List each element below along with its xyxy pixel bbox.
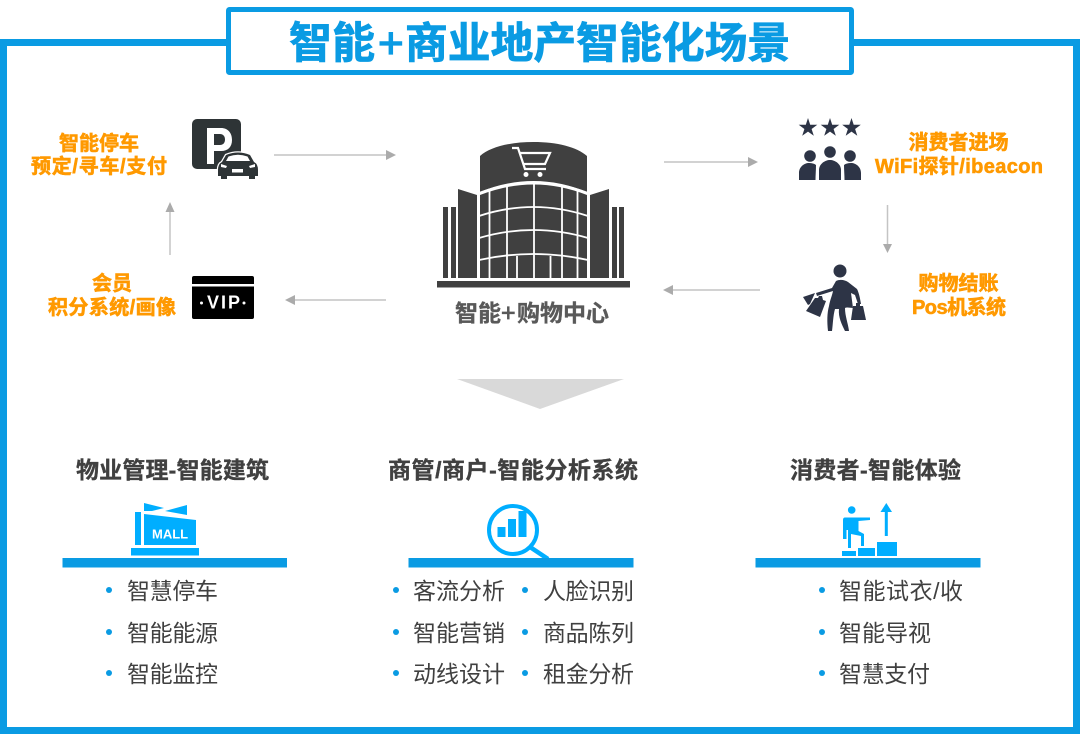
bar bbox=[62, 558, 287, 568]
building base bbox=[437, 281, 630, 288]
arrow: parking to mall bbox=[274, 150, 396, 160]
side wings and columns bbox=[458, 189, 609, 278]
heading: 商管/商户-智能分析系统 bbox=[388, 457, 638, 483]
label: consumer entry bbox=[875, 131, 1043, 178]
label: membership bbox=[48, 272, 176, 319]
label: consumer entry: WiFi探针/ibeacon bbox=[875, 155, 1043, 178]
panel: consumer experience bbox=[756, 457, 980, 687]
icon: magnifier with bars bbox=[489, 506, 548, 559]
bar bbox=[408, 558, 634, 568]
list bbox=[819, 578, 963, 687]
list: 智慧停车 bbox=[127, 578, 218, 604]
title text: 商业地产智能化场景 bbox=[405, 20, 790, 68]
title text: 智能 bbox=[289, 20, 375, 68]
list bbox=[393, 578, 634, 687]
label: membership: 会员 bbox=[92, 272, 132, 295]
list bbox=[106, 578, 218, 687]
icon: VIP card bbox=[192, 276, 254, 319]
divider triangle bbox=[457, 379, 624, 409]
arrow: checkout to mall bbox=[663, 285, 760, 295]
panel: mall operators bbox=[388, 457, 638, 687]
arrow: VIP to parking bbox=[166, 202, 174, 255]
list: 智能导视 bbox=[839, 620, 931, 646]
label: checkout bbox=[912, 272, 1006, 319]
icon: mall: MALL bbox=[152, 526, 188, 542]
title box bbox=[228, 10, 852, 72]
building label: 智能 bbox=[455, 300, 501, 326]
panel: property management bbox=[62, 457, 287, 687]
title text: + bbox=[378, 19, 404, 68]
list: 智慧支付 bbox=[839, 661, 930, 687]
building label: + bbox=[501, 299, 516, 327]
label: smart parking: 智能停车 bbox=[59, 131, 139, 155]
building label bbox=[455, 299, 609, 327]
label: smart parking bbox=[31, 131, 167, 178]
arrow: consumers to checkout bbox=[883, 205, 892, 253]
list: 智能监控 bbox=[127, 661, 218, 687]
label: membership: 积分系统/画像 bbox=[48, 295, 176, 319]
label: smart parking: 预定/寻车/支付 bbox=[31, 154, 167, 178]
heading: 物业管理-智能建筑 bbox=[76, 457, 269, 483]
label: checkout: Pos机系统 bbox=[912, 295, 1006, 319]
heading: 消费者-智能体验 bbox=[790, 457, 961, 483]
roof with cart bbox=[480, 142, 587, 192]
list: 客流分析 bbox=[413, 578, 505, 604]
list: 智能营销 bbox=[413, 620, 505, 646]
list: 动线设计 bbox=[413, 661, 505, 687]
building label: 购物中心 bbox=[517, 300, 609, 326]
list: 智能能源 bbox=[127, 620, 218, 646]
list: 人脸识别 bbox=[543, 578, 634, 604]
glass facade bbox=[480, 184, 587, 278]
list: 智能试衣/收 bbox=[839, 578, 963, 604]
arrow: mall to consumers bbox=[664, 157, 758, 167]
label: checkout: 购物结账 bbox=[918, 272, 998, 295]
arrow: mall to VIP bbox=[285, 295, 386, 305]
icon: parking bbox=[192, 119, 258, 179]
icon: shopping mall building bbox=[437, 142, 630, 288]
list: 租金分析 bbox=[543, 661, 634, 687]
bar bbox=[756, 558, 980, 568]
label: consumer entry: 消费者进场 bbox=[908, 131, 1008, 154]
icon: shopping cart bbox=[512, 148, 550, 177]
icon: three stars and people bbox=[799, 118, 861, 180]
icon: climbing steps bbox=[842, 503, 897, 556]
icon: VIP card: VIP bbox=[207, 292, 240, 312]
icon: mall bbox=[131, 503, 199, 556]
icon: shopper with bags bbox=[803, 264, 866, 331]
list: 商品陈列 bbox=[543, 620, 634, 646]
